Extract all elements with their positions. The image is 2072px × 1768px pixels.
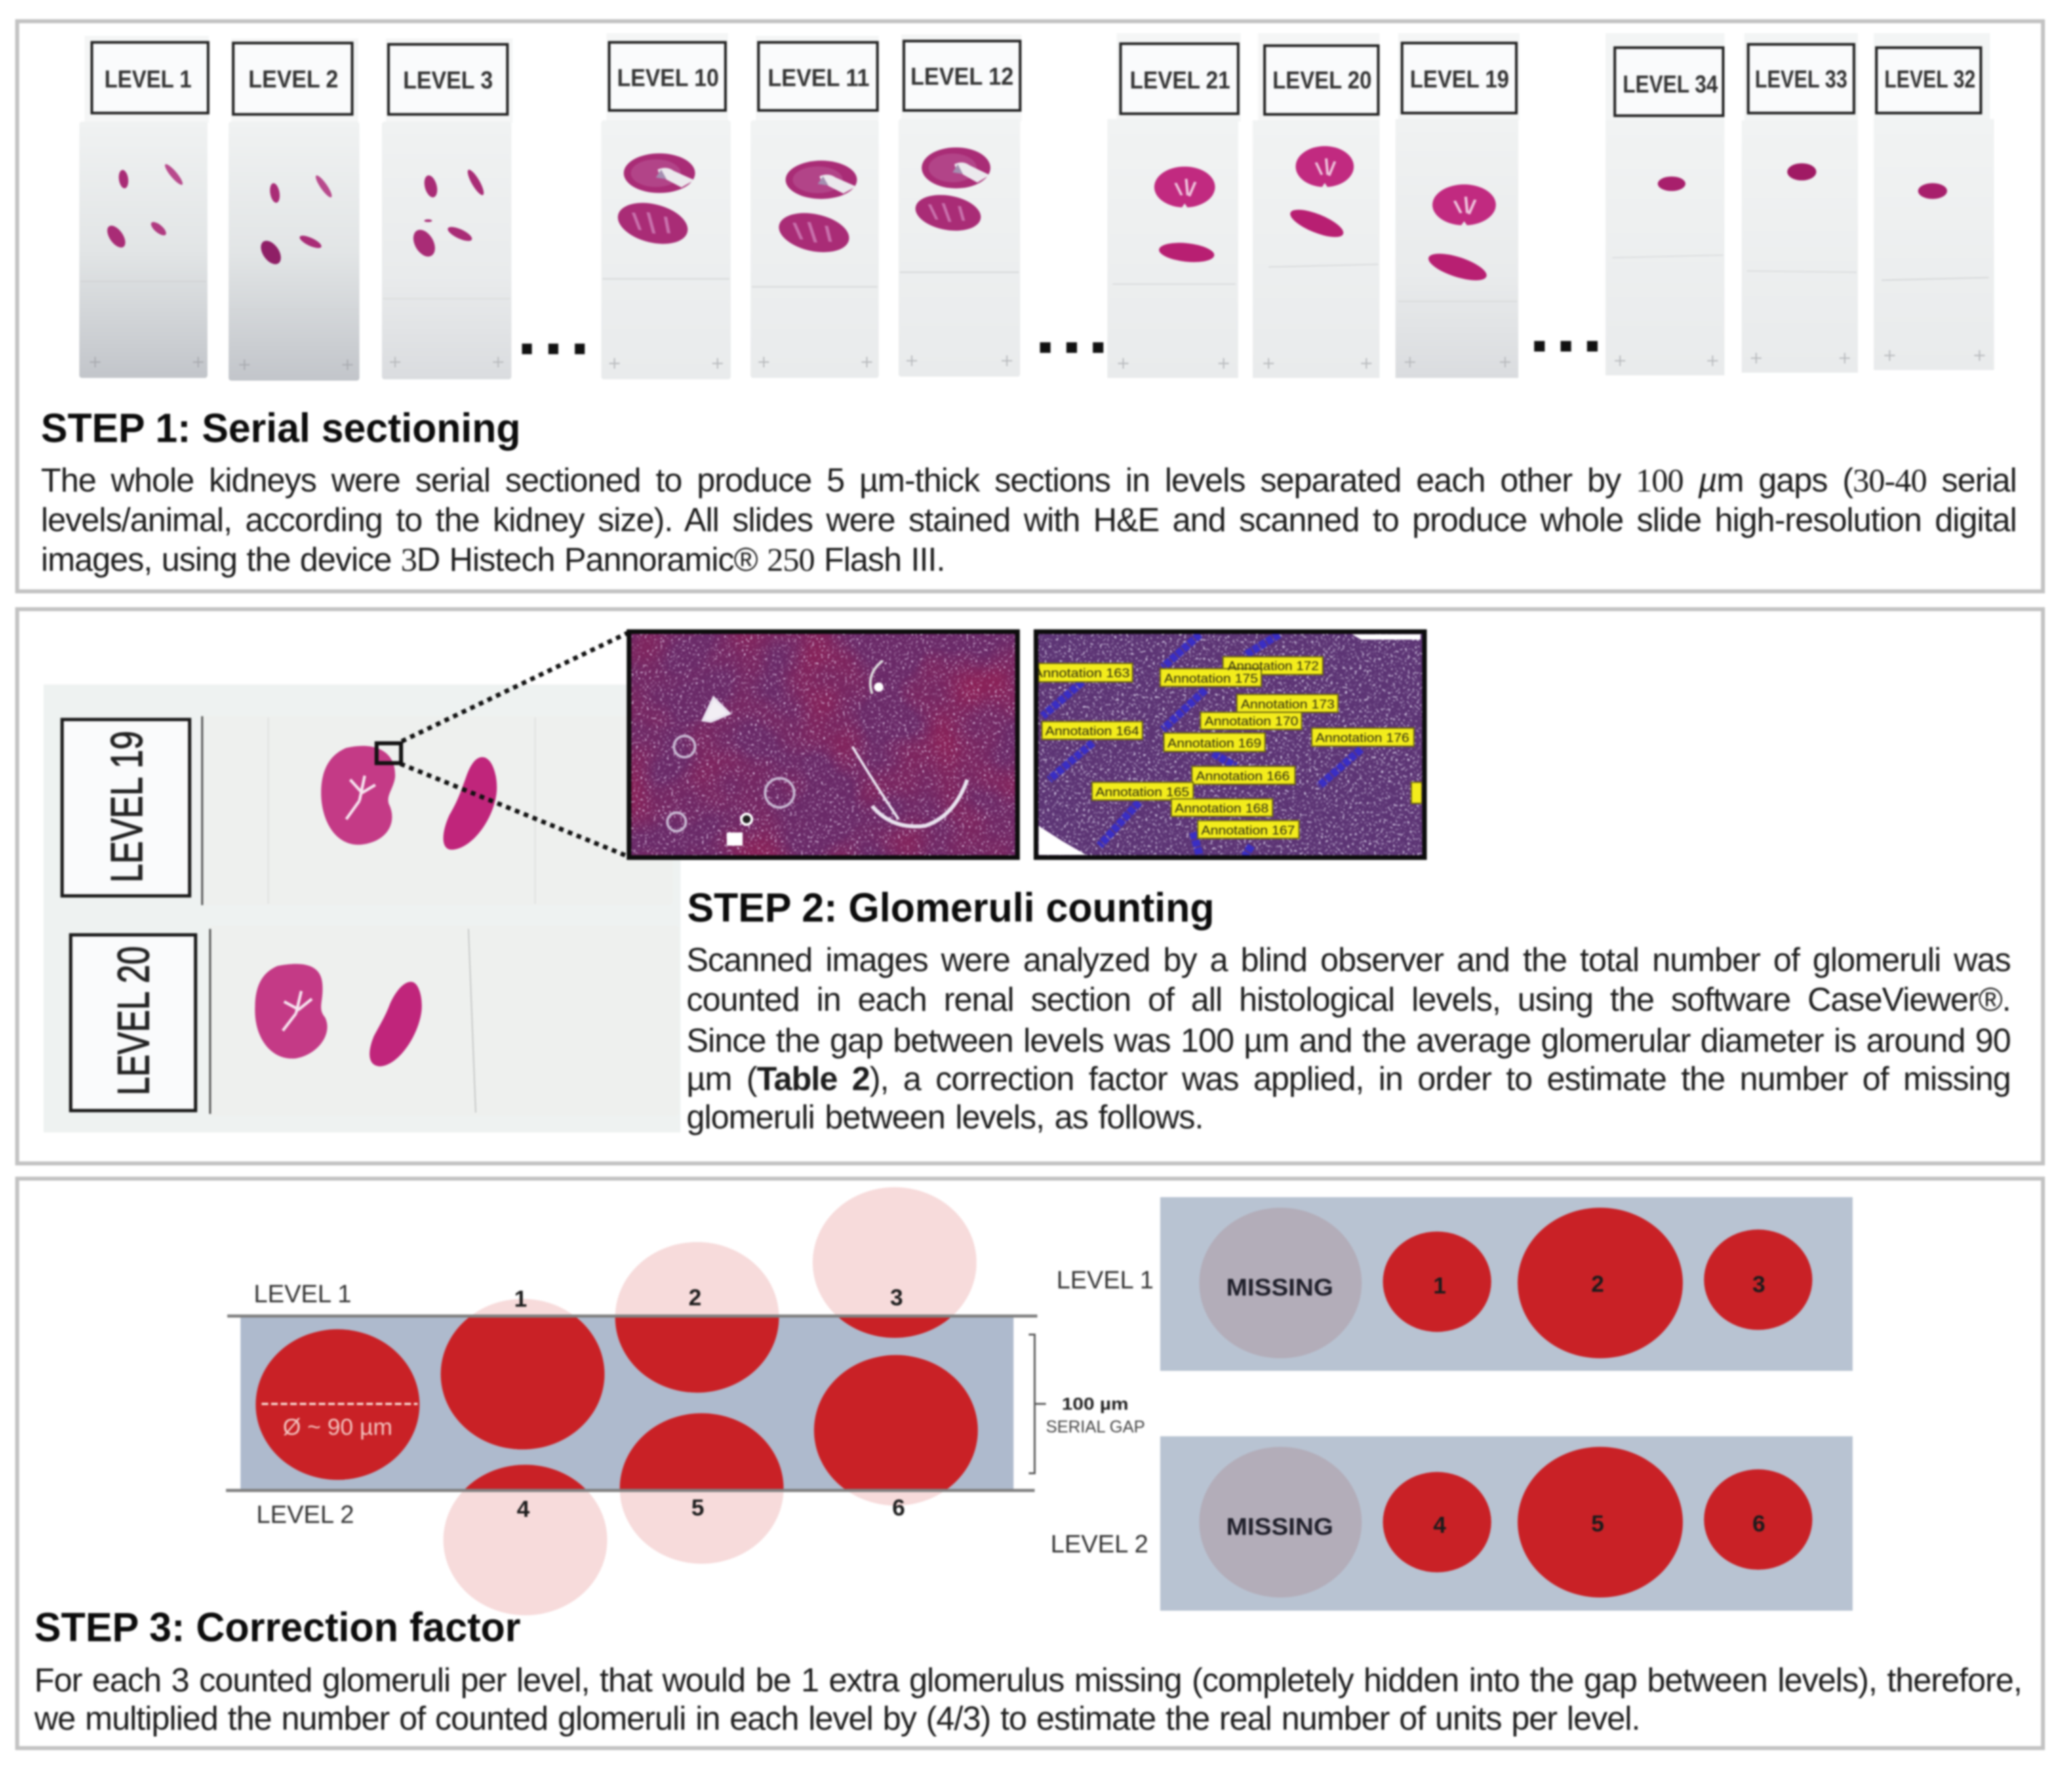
- slide: level 21: [1107, 33, 1241, 378]
- annotation labels: Annotation 169: [1168, 736, 1261, 750]
- text block: step 1 body: levels/animal, according to the kidney size). All slides were stained with H&E and scanned to produce whole slide high-resolution digital: [41, 502, 2016, 538]
- glomerulus numbers: 1: [514, 1287, 527, 1312]
- annotation labels: Annotation 165: [1096, 784, 1189, 799]
- text block: step 1 body: [41, 460, 2016, 580]
- slide: level 11: [751, 36, 879, 378]
- gap label: [1046, 1395, 1145, 1436]
- slide: level 33: LEVEL 33: [1755, 65, 1848, 93]
- level boundary lines: [226, 1316, 1037, 1491]
- slide: level 20: LEVEL 20: [1273, 66, 1372, 94]
- heading: step 3: STEP 3: Correction factor: [35, 1604, 521, 1650]
- diagram: serial gap cross-section: [226, 1187, 1145, 1615]
- ellipsis dots 1: [522, 344, 584, 354]
- diagram: level 2 counted glomeruli: 4: [1433, 1512, 1446, 1538]
- slide: level 33: [1742, 33, 1858, 373]
- slide: level 12: [898, 35, 1022, 377]
- slide: level 34: LEVEL 34: [1622, 71, 1718, 98]
- slide: level 32: [1874, 33, 1994, 370]
- diagram: level 1 counted glomeruli: LEVEL 1: [1056, 1265, 1153, 1293]
- text block: step 2 body: Since the gap between levels was 100 µm and the average glomerular diameter is around 90: [686, 1022, 2010, 1059]
- panel: step 1 serial sectioning: [17, 21, 2043, 591]
- heading: step 1: STEP 1: Serial sectioning: [41, 405, 521, 451]
- panel: step 3 correction factor: [17, 1179, 2043, 1748]
- diagram: level 1 counted glomeruli: 1: [1433, 1273, 1446, 1299]
- slide: level 12: LEVEL 12: [911, 62, 1014, 90]
- annotation strokes: [1043, 635, 1361, 856]
- slide: level 32: LEVEL 32: [1884, 65, 1976, 93]
- annotation labels: Annotation 172: [1228, 658, 1319, 672]
- glomerulus numbers: 5: [692, 1495, 704, 1521]
- annotation labels: Annotation 167: [1201, 823, 1295, 837]
- ellipsis dots 3: [1534, 341, 1597, 352]
- annotation labels: Annotation 163: [1033, 666, 1130, 680]
- text block: step 2 body: µm (Table 2), a correction factor was applied, in order to estimate the number of missing: [686, 1060, 2010, 1098]
- text block: step 2 body: [686, 941, 2010, 1138]
- slide: level 19: LEVEL 19: [1410, 65, 1509, 93]
- annotation labels: [1033, 657, 1422, 839]
- annotation labels: Annotation 170: [1204, 714, 1298, 728]
- diagram: level 1 counted glomeruli: 2: [1591, 1271, 1604, 1297]
- annotation labels: Annotation 173: [1241, 697, 1334, 711]
- slide: level 11: LEVEL 11: [768, 64, 869, 92]
- gap bracket: [1029, 1335, 1046, 1473]
- slide: level 19: [1395, 33, 1519, 378]
- diagram: level 1 counted glomeruli: MISSING: [1227, 1274, 1334, 1301]
- annotation labels: Annotation 166: [1196, 769, 1290, 783]
- annotation labels: Annotation 164: [1045, 724, 1139, 738]
- photo: slides level 19 and level 20: [43, 685, 681, 1132]
- reference glomerulus with diameter: Ø ~ 90 µm: [283, 1415, 393, 1441]
- diagram: serial gap cross-section: LEVEL 2: [256, 1500, 354, 1528]
- gap band: [241, 1316, 1014, 1491]
- slide: level 1: [79, 36, 209, 378]
- text block: step 2 body: counted in each renal section of all histological levels, using the software CaseViewer®.: [686, 982, 2010, 1019]
- diagram: level 2 counted glomeruli: 5: [1591, 1511, 1604, 1537]
- diagram: level 1 counted glomeruli: 3: [1753, 1272, 1766, 1298]
- slide: level 20 horizontal: LEVEL 20: [108, 946, 159, 1096]
- slide: level 34: [1606, 33, 1724, 376]
- diagram: level 2 counted glomeruli: 6: [1753, 1511, 1766, 1537]
- panel: step 2 glomeruli counting: [17, 609, 2043, 1163]
- slide: level 20 horizontal: [71, 925, 679, 1116]
- slide: level 2: LEVEL 2: [248, 65, 338, 93]
- slide: level 19 horizontal: [62, 716, 673, 905]
- inset: histology micrograph: [629, 632, 1018, 858]
- heading: step 2: STEP 2: Glomeruli counting: [687, 885, 1214, 931]
- glomerulus numbers: 3: [890, 1285, 903, 1311]
- text block: step 1 body: images, using the device 3D Histech Pannoramic® 250 Flash III.: [41, 541, 945, 578]
- reference glomerulus with diameter: [256, 1329, 420, 1480]
- gap label: SERIAL GAP: [1046, 1418, 1145, 1436]
- glomerulus numbers: 2: [689, 1285, 702, 1311]
- glomerulus numbers: 4: [517, 1497, 530, 1523]
- slide: level 20: [1253, 33, 1380, 378]
- text block: step 1 body: The whole kidneys were serial sectioned to produce 5 µm-thick sections in levels separated each other by 100 µm gaps (30-40 serial: [41, 462, 2016, 499]
- slide: level 10: [601, 33, 731, 379]
- glomeruli inside band: [439, 1317, 979, 1490]
- text block: step 3 body: [35, 1660, 2022, 1739]
- slide: level 1: LEVEL 1: [104, 65, 192, 93]
- diagram: level 2 counted glomeruli: LEVEL 2: [1050, 1529, 1149, 1558]
- slide: level 19 horizontal: LEVEL 19: [102, 731, 153, 883]
- slide: level 10: LEVEL 10: [617, 64, 719, 92]
- text block: step 2 body: Scanned images were analyzed by a blind observer and the total number of glomeruli was: [686, 942, 2010, 979]
- inset: annotated histology micrograph: [1033, 632, 1424, 858]
- glomerulus numbers: [514, 1285, 905, 1523]
- annotation labels: Annotation 176: [1315, 730, 1410, 744]
- annotation labels: Annotation 175: [1164, 671, 1258, 685]
- slide: level 21: LEVEL 21: [1130, 66, 1230, 94]
- gap label: 100 µm: [1062, 1395, 1128, 1414]
- glomerulus numbers: 6: [892, 1495, 905, 1521]
- glomeruli outside band (faded): [441, 1187, 978, 1615]
- dotted zoom lines: [401, 633, 628, 856]
- diagram: level 2 counted glomeruli: [1050, 1436, 1852, 1611]
- diagram: level 1 counted glomeruli: [1056, 1197, 1852, 1371]
- slide: level 3: LEVEL 3: [403, 66, 493, 94]
- ellipsis dots 2: [1040, 342, 1103, 353]
- slide: level 3: [382, 39, 513, 379]
- diagram: level 2 counted glomeruli: MISSING: [1227, 1514, 1334, 1540]
- slide: level 2: [228, 39, 359, 380]
- level labels left: LEVEL 1: [254, 1279, 351, 1308]
- text block: step 3 body: we multiplied the number of counted glomeruli in each level by (4/3) to estimate the real number of units per level.: [35, 1700, 1640, 1737]
- zoom marker rectangle: [376, 743, 401, 763]
- annotation labels: Annotation 168: [1175, 801, 1269, 816]
- text block: step 2 body: glomeruli between levels, as follows.: [686, 1100, 1203, 1136]
- text block: step 3 body: For each 3 counted glomeruli per level, that would be 1 extra glomerulus missing (completely hidden into the gap between levels), therefore,: [35, 1662, 2022, 1699]
